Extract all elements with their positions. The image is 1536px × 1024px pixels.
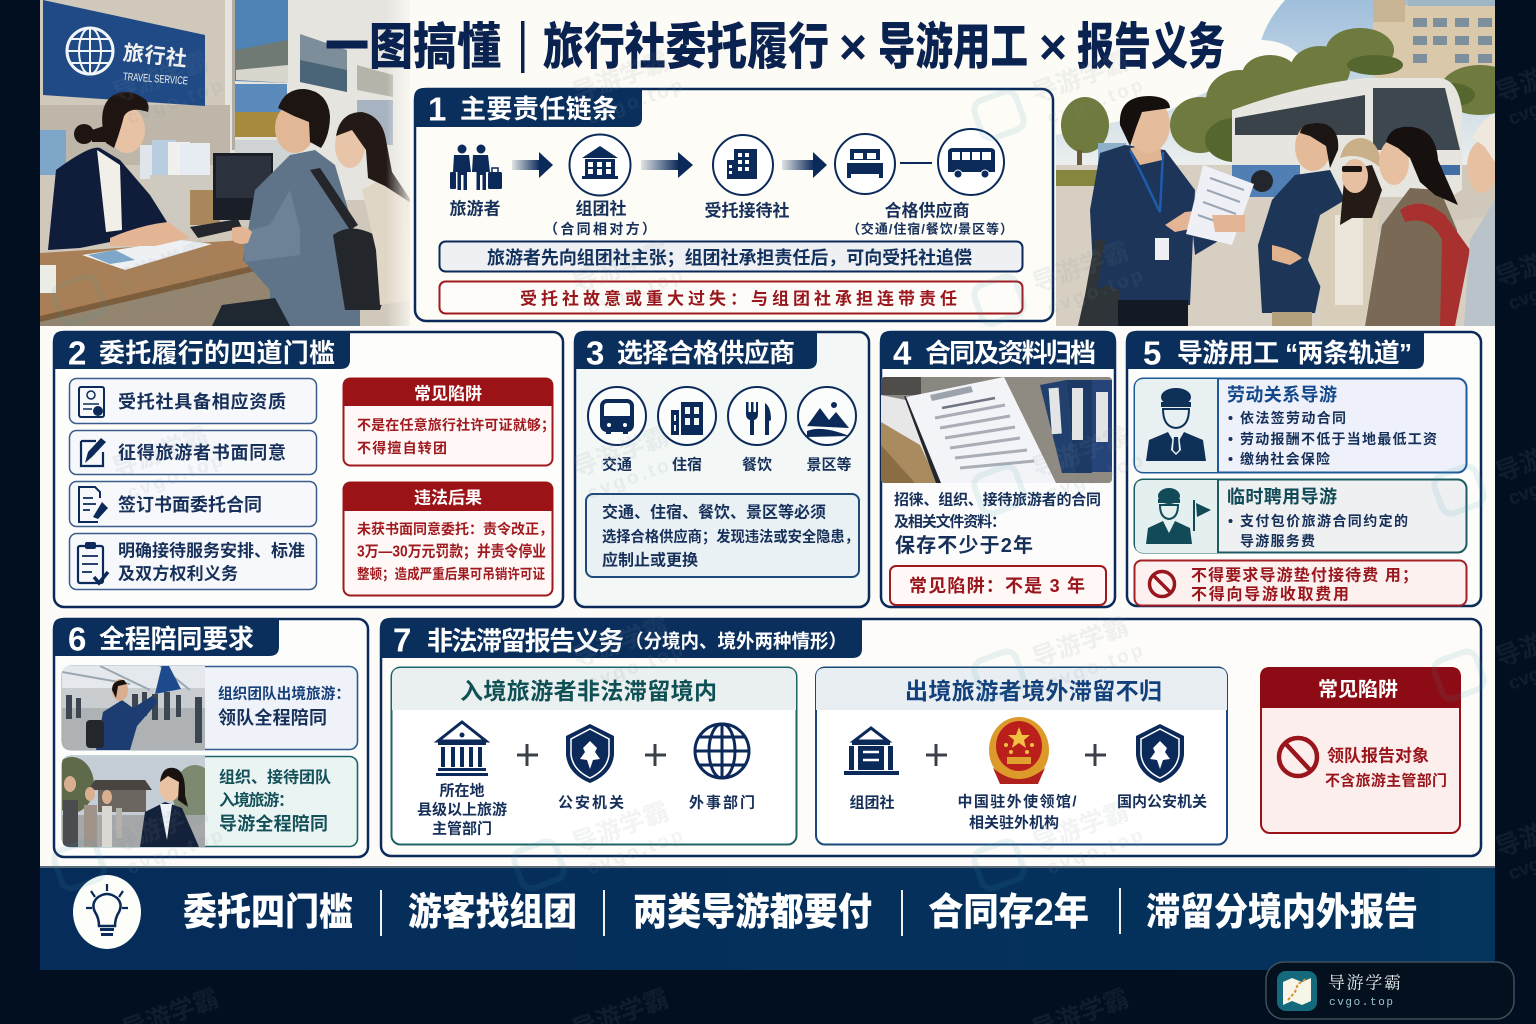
watermark pattern: 导游学霸 <box>109 237 212 298</box>
panel 6: full-trip accompaniment: 全程陪同要求 <box>99 624 254 654</box>
callout: not three years: 常见陷阱：不是 3 年 <box>909 575 1085 596</box>
title: × <box>839 19 867 75</box>
panel 4: contract archive: 保存不少于2年 <box>895 534 1033 557</box>
watermark pattern: 导游学霸 <box>1029 237 1132 298</box>
plus sign <box>1085 744 1106 766</box>
icon: domestic police shield <box>1136 724 1184 783</box>
card: inbound overstay: 主管部门 <box>432 820 492 838</box>
card: employed guide: 缴纳社会保险 <box>1240 451 1330 467</box>
icon: lightbulb <box>73 875 141 949</box>
watermark pattern: cvgo.top <box>584 74 688 129</box>
threshold: service arrangement <box>70 534 316 590</box>
title: 一图搞懂 <box>325 19 501 75</box>
photo: travel agency counter <box>40 0 416 326</box>
watermark pattern: 导游学霸 <box>569 422 672 483</box>
connector line <box>900 162 932 164</box>
panel 3: qualified suppliers: 选择合格供应商 <box>617 338 795 368</box>
panel 3: qualified suppliers: 餐饮 <box>742 456 772 474</box>
card: inbound tours: 入境旅游： <box>219 790 294 810</box>
icon: police shield <box>566 724 614 783</box>
note: supplier duty: 交通、住宿、餐饮、景区等必须 <box>602 502 826 522</box>
card: outbound overstay: 中国驻外使领馆/ <box>958 792 1077 810</box>
icon: tourists <box>450 144 502 190</box>
watermark pattern: 导游学霸 <box>1029 612 1132 673</box>
title <box>325 19 1225 75</box>
panel 4: contract archive <box>880 331 1116 607</box>
watermark pattern: 导游学霸 <box>569 612 672 673</box>
card: temporary guide: 导游服务费 <box>1240 533 1315 549</box>
panel 3: qualified suppliers: 景区等 <box>806 456 852 474</box>
note: claim route <box>440 242 1022 272</box>
card: outbound overstay: 国内公安机关 <box>1117 794 1207 810</box>
title: × <box>1039 19 1067 75</box>
card: outbound tours: 领队全程陪同 <box>218 707 327 728</box>
card: inbound overstay: 入境旅游者非法滞留境内 <box>460 678 717 704</box>
brand badge <box>1266 962 1514 1019</box>
callout: common pitfalls: 常见陷阱 <box>414 384 482 404</box>
note: joint liability: 受托社故意或重大过失：与组团社承担连带责任 <box>520 288 957 308</box>
summary banner: 滞留分境内外报告 <box>1146 892 1418 934</box>
note: supplier duty: 选择合格供应商；发现违法或安全隐患， <box>602 528 859 546</box>
watermark pattern: cvgo.top <box>1044 449 1148 504</box>
summary banner: 游客找组团 <box>408 891 577 934</box>
callout: common pitfalls <box>343 378 555 466</box>
card: outbound overstay: 相关驻外机构 <box>969 814 1059 832</box>
panel 7: illegal overstay reporting: 7 <box>393 622 411 658</box>
plus sign <box>517 744 538 766</box>
card: temporary guide: 临时聘用导游 <box>1227 486 1337 507</box>
callout: report pitfall: 常见陷阱 <box>1318 678 1398 701</box>
watermark pattern: cvgo.top <box>124 824 228 879</box>
watermark pattern: cvgo.top <box>584 264 688 319</box>
watermark pattern: cvgo.top <box>584 824 688 879</box>
arrow 1 <box>512 152 553 178</box>
icon: organizing agency building <box>844 728 899 775</box>
arrow 2 <box>641 152 693 178</box>
note: supplier duty: 应制止或更换 <box>602 550 698 570</box>
plus sign <box>645 744 666 766</box>
callout: report pitfall: 不含旅游主管部门 <box>1325 772 1447 790</box>
card: outbound tours: 组织团队出境旅游： <box>218 684 350 702</box>
callout: no fees from guides: 不得要求导游垫付接待费 用； <box>1191 566 1418 584</box>
callout: legal consequences: 整顿；造成严重后果可吊销许可证 <box>357 566 545 583</box>
watermark pattern: cvgo.top <box>1044 264 1148 319</box>
panel 1: main liability chain: 旅游者 <box>450 198 500 218</box>
panel 1: main liability chain: 主要责任链条 <box>460 94 618 124</box>
card: employed guide: 依法签劳动合同 <box>1240 410 1346 426</box>
panel 1: main liability chain: 组团社 <box>576 198 626 218</box>
panel 2: four thresholds: 委托履行的四道门槛 <box>99 338 335 368</box>
panel 3: qualified suppliers: 住宿 <box>672 456 702 474</box>
note: joint liability <box>440 282 1022 314</box>
threshold: written consent: 征得旅游者书面同意 <box>118 442 286 463</box>
watermark pattern: 导游学霸 <box>569 797 672 858</box>
watermark pattern: cvgo.top <box>124 74 228 129</box>
card: temporary guide <box>1134 480 1466 553</box>
callout: legal consequences <box>343 482 553 596</box>
panel 1: main liability chain: 1 <box>428 90 446 128</box>
threshold: service arrangement: 明确接待服务安排、标准 <box>118 542 305 560</box>
card: inbound tours: 导游全程陪同 <box>219 813 328 834</box>
card: inbound tours <box>50 756 358 847</box>
arrow 3 <box>782 152 827 178</box>
callout: legal consequences: 未获书面同意委托：责令改正， <box>357 521 553 537</box>
watermark pattern: cvgo.top <box>1044 824 1148 879</box>
icon: accommodation <box>835 134 895 194</box>
icon: foreign affairs globe <box>695 724 749 778</box>
watermark pattern: 导游学霸 <box>569 237 672 298</box>
threshold: qualification: 受托社具备相应资质 <box>118 391 286 412</box>
card: outbound overstay: 出境旅游者境外滞留不归 <box>905 678 1162 704</box>
threshold: service arrangement: 及双方权利义务 <box>118 564 238 584</box>
card: temporary guide: 支付包价旅游合同约定的 <box>1240 513 1408 529</box>
watermark pattern: 导游学霸 <box>109 797 212 858</box>
panel 3: qualified suppliers <box>574 331 869 607</box>
panel 2: four thresholds: 2 <box>68 334 86 372</box>
photo: tour guide with tourists and coach <box>1056 0 1520 326</box>
title: 旅行社委托履行 <box>543 19 829 75</box>
watermark pattern: 导游学霸 <box>1029 47 1132 108</box>
panel 5: two tracks for guides <box>1126 331 1481 606</box>
card: inbound tours: 组织、接待团队 <box>219 768 331 786</box>
brand badge: cvgo.top <box>1329 997 1393 1009</box>
icon: coach <box>938 129 1004 195</box>
card: inbound overstay: 公安机关 <box>558 794 624 812</box>
plus sign <box>926 744 947 766</box>
threshold: written contract: 签订书面委托合同 <box>118 494 262 515</box>
card: inbound overstay <box>392 668 796 844</box>
summary banner: 两类导游都要付 <box>633 891 872 934</box>
icon: scenic mountains <box>798 387 856 445</box>
panel 5: two tracks for guides: 5 <box>1143 334 1161 372</box>
card: outbound tours <box>62 664 358 750</box>
photo: travel agency counter: TRAVEL SERVICE <box>123 71 188 88</box>
callout: common pitfalls: 不是在任意旅行社许可证就够； <box>357 417 555 434</box>
summary banner <box>40 866 1495 970</box>
panel 3: qualified suppliers: 交通 <box>602 456 632 474</box>
callout: legal consequences: 违法后果 <box>414 488 482 508</box>
watermark pattern: cvgo.top <box>584 449 688 504</box>
watermark pattern: 导游学霸 <box>569 47 672 108</box>
photo: travel agency counter: 旅行社 <box>122 42 188 71</box>
card: outbound overstay: 组团社 <box>849 794 895 812</box>
panel 1: main liability chain: 合格供应商 <box>884 200 970 220</box>
threshold: qualification <box>70 378 316 424</box>
threshold: written consent <box>70 430 316 474</box>
threshold: written contract <box>70 482 316 526</box>
callout: common pitfalls: 不得擅自转团 <box>357 440 447 456</box>
panel 6: full-trip accompaniment: 6 <box>68 620 86 658</box>
summary banner: 合同存2年 <box>928 892 1089 934</box>
callout: report pitfall: 领队报告对象 <box>1327 746 1429 766</box>
panel 4: contract archive: 4 <box>893 334 912 372</box>
panel 7: illegal overstay reporting: 非法滞留报告义务 <box>427 626 624 656</box>
note: claim route: 旅游者先向组团社主张；组团社承担责任后，可向受托社追偿 <box>487 247 972 268</box>
title: 报告义务 <box>1077 19 1225 75</box>
icon: tourism authority <box>436 722 488 776</box>
watermark pattern: 导游学霸 <box>109 47 212 108</box>
summary banner: 委托四门槛 <box>183 892 353 934</box>
panel 7: illegal overstay reporting: （分境内、境外两种情形） <box>625 630 847 652</box>
icon: fork and knife <box>728 387 786 445</box>
icon: national emblem <box>989 717 1049 784</box>
icon: brand logo <box>1277 971 1317 1011</box>
panel 3: qualified suppliers: 3 <box>586 334 604 372</box>
watermark pattern: 导游学霸 <box>109 422 212 483</box>
card: inbound overstay: 外事部门 <box>689 794 755 812</box>
callout: no fees from guides <box>1134 560 1466 606</box>
icon: organizing agency <box>570 134 630 196</box>
title backdrop <box>410 0 1060 326</box>
photo: contract on clipboard and binders <box>881 377 1112 483</box>
card: inbound overstay: 县级以上旅游 <box>417 800 507 818</box>
panel 4: contract archive: 及相关文件资料： <box>894 512 1006 530</box>
title: 导游用工 <box>878 19 1028 75</box>
panel 1: main liability chain: （合同相对方） <box>544 221 656 237</box>
panel 1: main liability chain: （交通/住宿/餐饮/景区等） <box>847 222 1013 236</box>
brand badge: 导游学霸 <box>1328 974 1401 992</box>
watermark pattern: cvgo.top <box>1044 639 1148 694</box>
watermark pattern: cvgo.top <box>1044 74 1148 129</box>
note: supplier duty <box>586 494 859 577</box>
card: outbound overstay <box>816 668 1227 844</box>
icon: entrusted agency <box>713 135 773 195</box>
watermark pattern: 导游学霸 <box>1029 422 1132 483</box>
panel 4: contract archive: 合同及资料归档 <box>925 338 1096 368</box>
card: inbound overstay: 所在地 <box>439 782 485 800</box>
watermark pattern: cvgo.top <box>124 264 228 319</box>
callout: not three years <box>890 566 1106 605</box>
panel 7: illegal overstay reporting <box>380 618 1481 856</box>
icon: hotel building <box>658 387 716 445</box>
panel 5: two tracks for guides: 导游用工 “两条轨道” <box>1177 338 1412 368</box>
panel 4: contract archive: 招徕、组织、接待旅游者的合同 <box>894 490 1101 508</box>
card: employed guide <box>1134 378 1466 472</box>
panel 6: full-trip accompaniment <box>50 618 368 857</box>
watermark pattern: cvgo.top <box>584 639 688 694</box>
icon: bus <box>588 387 646 445</box>
callout: legal consequences: 3万—30万元罚款；并责令停业 <box>357 542 546 560</box>
callout: no fees from guides: 不得向导游收取费用 <box>1191 584 1349 604</box>
panel 1: main liability chain: 受托接待社 <box>704 200 790 220</box>
card: employed guide: 劳动报酬不低于当地最低工资 <box>1240 431 1437 447</box>
panel 1: main liability chain <box>414 88 1053 321</box>
watermark pattern: 导游学霸 <box>1029 797 1132 858</box>
callout: report pitfall <box>1260 667 1461 833</box>
card: employed guide: 劳动关系导游 <box>1227 384 1337 405</box>
panel 2: four thresholds <box>53 331 563 607</box>
watermark pattern: cvgo.top <box>124 449 228 504</box>
